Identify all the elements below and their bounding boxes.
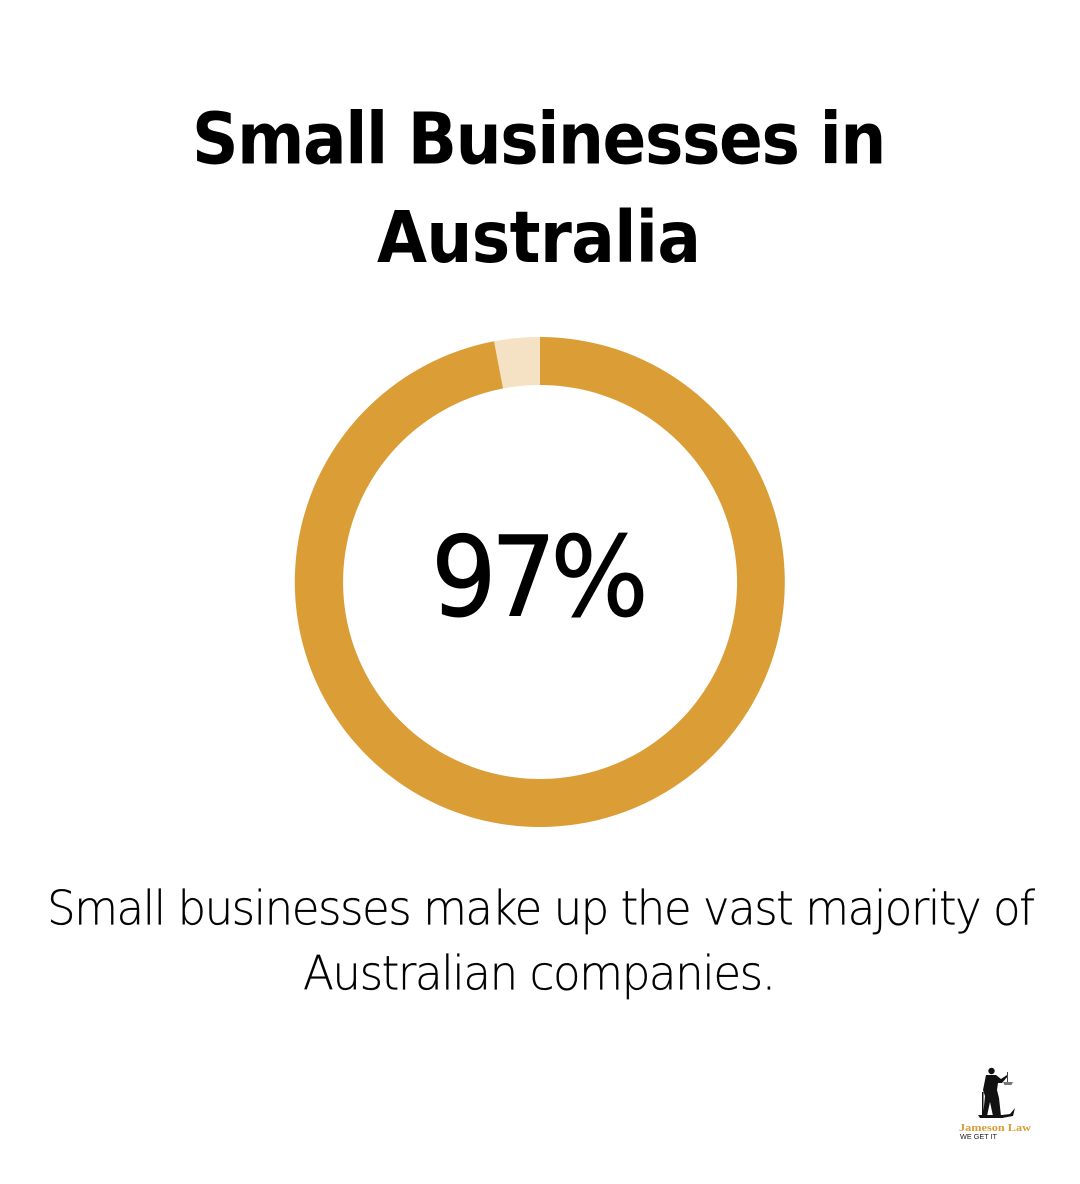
title: Australia <box>377 197 701 280</box>
icon: lady justice figure <box>978 1068 1015 1118</box>
logo name: Jameson Law <box>959 1122 1031 1134</box>
donut chart: 97% <box>295 337 785 827</box>
center value: 97% <box>431 514 649 642</box>
logo: Jameson Law <box>959 1068 1031 1141</box>
title: Small Businesses in <box>192 99 886 181</box>
title <box>192 99 886 280</box>
description text <box>47 880 1036 1001</box>
ring: 97 percent segment <box>295 337 785 827</box>
description text: Small businesses make up the vast majority of <box>47 880 1036 936</box>
logo tagline: WE GET IT <box>960 1134 998 1141</box>
ring: remaining 3 percent segment <box>494 337 540 388</box>
description text: Australian companies. <box>303 945 776 1001</box>
